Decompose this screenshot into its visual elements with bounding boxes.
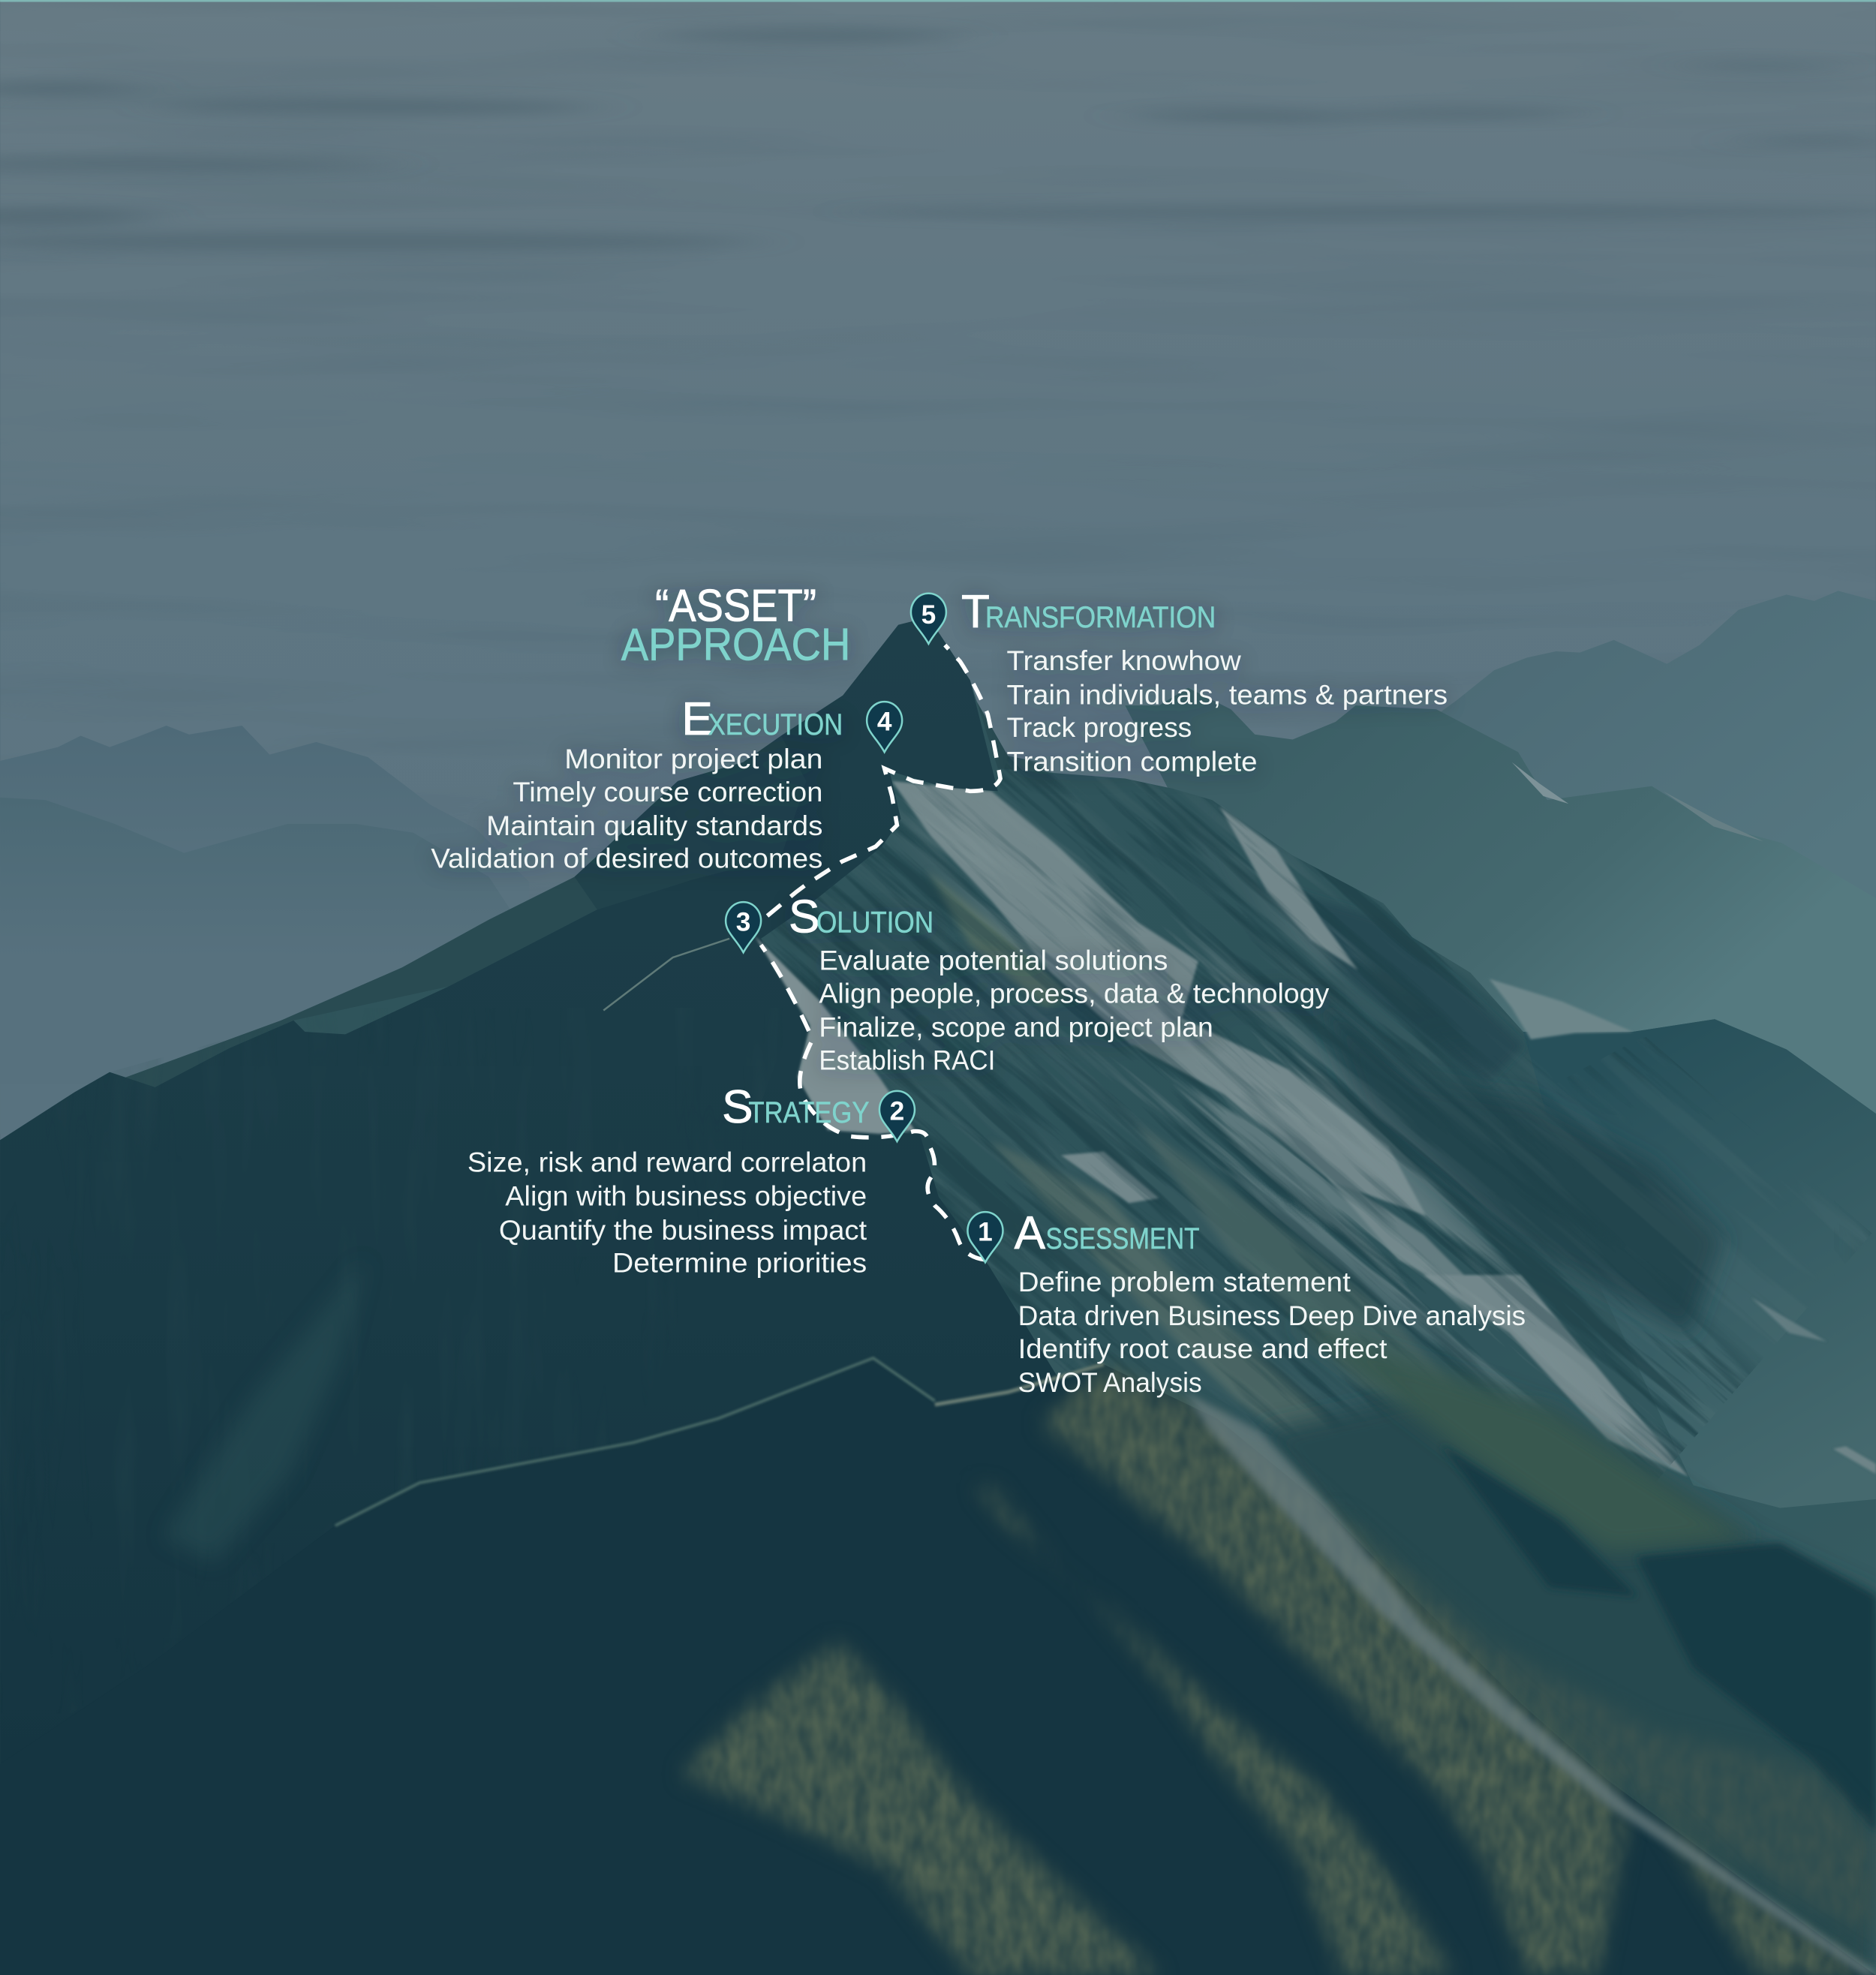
list: solution: Align people, process, data & technology [819, 978, 1330, 1009]
pin 5: 5 [921, 600, 936, 630]
right lit slope [1332, 1508, 1876, 1944]
pin 2: 2 [890, 1097, 904, 1126]
list: strategy: Quantify the business impact [499, 1215, 867, 1246]
list: strategy [467, 1147, 867, 1279]
title [621, 580, 850, 670]
list: transformation: Track progress [1006, 712, 1192, 743]
lower right slopes [1260, 1320, 1876, 1975]
list: solution: Evaluate potential solutions [819, 945, 1168, 976]
list: transformation [1006, 645, 1448, 777]
olive stripe [927, 870, 1071, 1008]
heading: execution: XECUTION [708, 708, 843, 741]
heading: strategy: S [722, 1081, 753, 1133]
snow patches [892, 781, 1876, 1477]
list: assessment: Identify root cause and effect [1018, 1333, 1387, 1364]
pin 1: 1 [978, 1218, 993, 1247]
heading: assessment: SSESSMENT [1046, 1222, 1199, 1255]
heading: assessment [1015, 1207, 1199, 1259]
pale ridge line [1184, 1392, 1876, 1975]
step 3: solution [726, 891, 1330, 1075]
list: transformation: Transition complete [1006, 746, 1258, 777]
list: execution [431, 744, 822, 874]
list: solution: Finalize, scope and project plan [819, 1012, 1213, 1043]
title: APPROACH [621, 619, 850, 670]
step 4: execution [431, 693, 902, 874]
list: execution: Maintain quality standards [486, 810, 822, 841]
list: transformation: Transfer knowhow [1006, 645, 1241, 676]
right slope haze [1523, 1019, 1876, 1508]
step 1: assessment [967, 1207, 1526, 1398]
pin 4: 4 [877, 708, 892, 737]
pin 3 [726, 902, 761, 952]
step 5: transformation [911, 586, 1448, 777]
pin 2 [879, 1091, 915, 1141]
list: assessment: Data driven Business Deep Dive analysis [1018, 1300, 1526, 1331]
list: assessment: SWOT Analysis [1018, 1367, 1202, 1398]
list: execution: Monitor project plan [564, 744, 822, 774]
pin 1 [967, 1212, 1003, 1262]
step 2: strategy [467, 1081, 915, 1279]
pin 5 [911, 594, 946, 644]
heading: solution: S [789, 891, 819, 942]
right slope [0, 618, 1876, 1975]
list: strategy: Determine priorities [612, 1248, 867, 1279]
list: assessment: Define problem statement [1018, 1267, 1351, 1297]
heading: execution: E [681, 693, 713, 745]
dark left side and summit face [0, 618, 1071, 1763]
heading: solution: OLUTION [816, 905, 933, 939]
heading: strategy [722, 1081, 870, 1133]
list: execution: Validation of desired outcomes [431, 843, 822, 874]
list: solution: Establish RACI [819, 1045, 995, 1075]
foreground ridge [0, 1358, 1876, 1975]
distant mountains left [0, 726, 542, 1134]
heading: execution [681, 693, 843, 745]
snow wedge beneath pin 3 [755, 936, 915, 1134]
list: transformation: Train individuals, teams & partners [1006, 680, 1448, 711]
pin 3: 3 [736, 908, 750, 937]
heading: transformation: RANSFORMATION [985, 600, 1216, 634]
list: strategy: Size, risk and reward correlaton [467, 1147, 867, 1177]
heading: transformation [961, 586, 1216, 638]
heading: strategy: TRATEGY [748, 1096, 870, 1129]
dashed trail [761, 645, 1000, 1260]
main mountain [0, 489, 1876, 1975]
pin 4 [867, 702, 902, 752]
list: execution: Timely course correction [513, 777, 822, 807]
list: solution [819, 945, 1330, 1075]
foreground ridge highlight [335, 1358, 935, 1526]
lit grass bands [681, 1364, 1876, 1975]
dark rock streaks [1009, 756, 1740, 1453]
heading: solution [789, 891, 933, 942]
list: strategy: Align with business objective [505, 1181, 867, 1212]
rear ridge [0, 618, 1260, 1386]
title: “ASSET” [655, 580, 816, 631]
lower slope [989, 1121, 1487, 1499]
streaks over snow [899, 810, 1681, 1472]
trail ridge near pin 3 [603, 939, 729, 1010]
heading: assessment: A [1015, 1207, 1046, 1259]
distant mountains right [1125, 591, 1876, 1210]
list: assessment [1018, 1267, 1526, 1398]
heading: transformation: T [961, 586, 990, 638]
